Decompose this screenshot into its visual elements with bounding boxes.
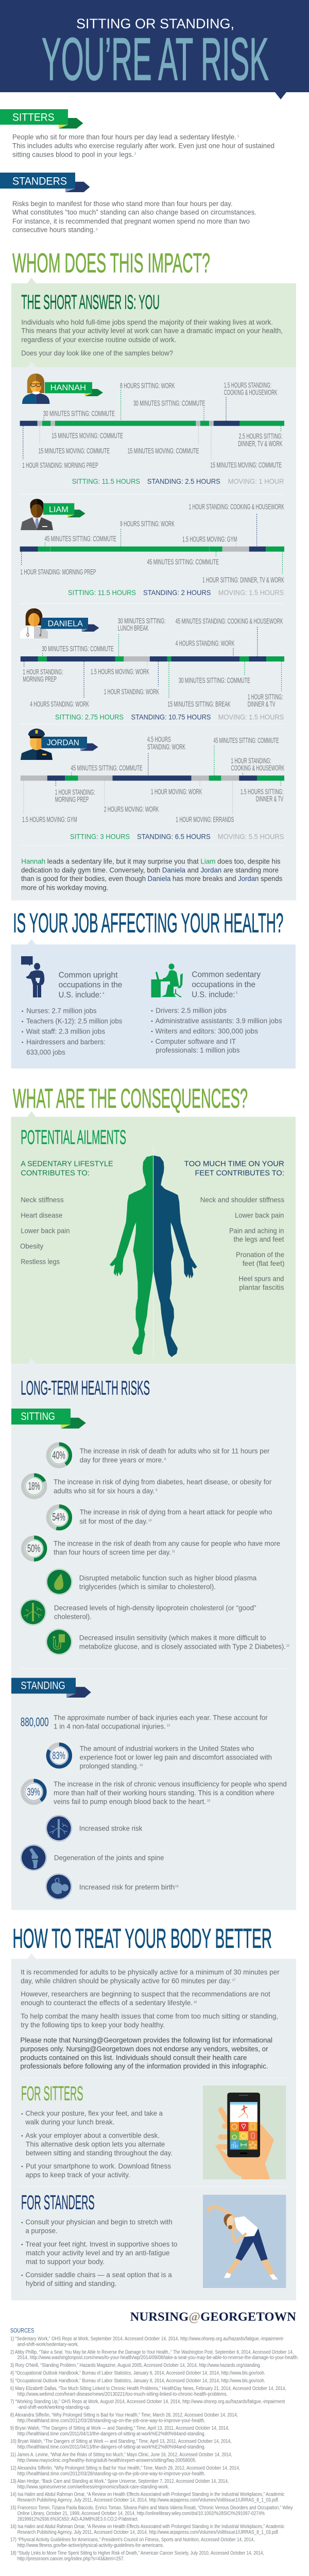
- stat text: 54%: 10: [148, 1519, 152, 1522]
- stat text: 83%: 14: [139, 1764, 143, 1767]
- sources list: 5) “Occupational Outlook Handbook,” Bureau of Labor Statistics, January 8, 2014, Accessed October 14, 2014, http://www.bls.gov/ooh.: [10, 2378, 265, 2384]
- sources list: -and-shift-work/working-standing-up.: [18, 2405, 91, 2411]
- sources list: http://pressroom.cancer.org/index.php?s=43&item=257.: [18, 2556, 125, 2562]
- timeline labels: Jordan: DINNER & TV: [256, 795, 283, 804]
- timeline labels: Daniela: 30 MINUTES SITTING: COMMUTE: [42, 645, 114, 653]
- totals: Jordan: MOVING: 5.5 HOURS: [218, 833, 284, 841]
- upright occupations intro: 4: [102, 992, 105, 995]
- stat number: 880,000: 880,000: [21, 1716, 48, 1730]
- recommendations text: try the following tips to keep your body healthy.: [21, 2021, 165, 2029]
- standers description: 3: [96, 228, 98, 231]
- sitters description: 2: [134, 152, 136, 156]
- sources list: http://www.webmd.com/heart-disease/news/20130221/too-much-sitting-linked-to-chronic-health-problems.: [18, 2392, 228, 2397]
- stat text: 40%: day for three years or more.: [80, 1455, 164, 1464]
- stat text: 54%: sit for most of the day.: [79, 1517, 148, 1526]
- timeline labels: Jordan: 4.5 HOURS: [147, 735, 171, 744]
- timeline labels: Jordan: 1 HOUR MOVING: ERRANDS: [176, 816, 234, 824]
- stat text: 39%: veins fail to pump enough blood back to the heart.: [54, 1797, 206, 1805]
- standing ailments list: Neck and shoulder stiffness: [200, 1196, 284, 1204]
- recommendations text: However, researchers are beginning to suspect that the recommendations are not: [21, 1990, 270, 1998]
- ribbon: sitting: [11, 1409, 86, 1429]
- stat text: 50%: [54, 1539, 280, 1556]
- profile: Jordan: [21, 728, 284, 841]
- risk text: cholesterol: Decreased levels of high-density lipoprotein cholesterol (or “good”: [54, 1604, 256, 1612]
- totals: Hannah: MOVING: 1 HOUR: [228, 477, 284, 485]
- sitters description: 1: [237, 135, 239, 138]
- stat text: 40%: [80, 1447, 270, 1464]
- sedentary occupations intro: occupations in the: [192, 980, 255, 989]
- sedentary ailments list: Obesity: [20, 1242, 43, 1250]
- icon: arteries: [20, 1599, 46, 1625]
- risk text: joints: Degeneration of the joints and spine: [54, 1853, 164, 1861]
- stat text: 18%: 9: [156, 1489, 158, 1492]
- sitters description: People who sit for more than four hours per day lead a sedentary lifestyle.: [12, 133, 236, 141]
- stat text: 50%: than four hours of screen time per day.: [54, 1548, 171, 1556]
- timeline labels: Hannah: 8 HOURS SITTING: WORK: [120, 381, 175, 390]
- ribbon: Daniela: [41, 618, 99, 632]
- sedentary ailments list: [20, 1196, 70, 1265]
- intro text: Does your day look like one of the samples below?: [21, 349, 173, 357]
- donut: 39%: 39%: [27, 1786, 40, 1798]
- summary text: than is good for their bodies, even though Daniela has more breaks and Jordan spends: [21, 874, 282, 883]
- totals: Daniela: [55, 713, 284, 721]
- standing ailments list: plantar fascitis: [239, 1283, 284, 1291]
- icon: standing worker: [21, 956, 44, 997]
- column heading: sedentary lifestyle: [21, 1159, 113, 1177]
- recommendations text: enough to counteract the effects of a sedentary lifestyle.: [21, 1998, 193, 2007]
- ribbon: standers: STANDERS: [12, 175, 67, 187]
- upright occupations list: 633,000 jobs: [26, 1048, 65, 1056]
- stat text: 83%: [80, 1744, 272, 1770]
- ribbon: Hannah: [45, 382, 103, 396]
- upright occupations intro: Common upright: [59, 971, 118, 979]
- panel: potential ailments: POTENTIAL AILMENTS: [21, 1126, 126, 1148]
- tips for standers: [22, 2218, 178, 2287]
- ribbon: Jordan: [41, 737, 98, 751]
- summary text: more of his workday moving.: [21, 883, 108, 891]
- icon: blood pressure cuff: [46, 1629, 72, 1655]
- timeline labels: Jordan: 1 HOUR STANDING:: [231, 757, 271, 766]
- standing ailments list: Heel spurs and: [238, 1275, 284, 1283]
- standers description: For instance, it is recommended that pregnant women spend no more than two: [12, 217, 250, 225]
- totals: Daniela: MOVING: 1.5 HOURS: [218, 713, 284, 721]
- sources list: and-shift-work/sedentary-work.: [18, 2342, 79, 2347]
- timeline labels: Liam: 9 HOURS SITTING: WORK: [120, 520, 175, 529]
- timeline labels: Daniela: 1.5 HOURS MOVING: WORK: [91, 667, 149, 676]
- tips for standers: hybrid of sitting and standing.: [26, 2279, 116, 2287]
- standers description: What constitutes “too much” standing can also change based on circumstances.: [12, 208, 256, 216]
- column heading: too much time on feet: FEET CONTRIBUTES TO:: [195, 1169, 284, 1178]
- sedentary occupations intro: 5: [236, 992, 238, 995]
- sedentary occupations intro: U.S. include:: [192, 990, 235, 999]
- donut: 54%: [48, 1506, 70, 1529]
- section: sitters: [0, 109, 274, 158]
- totals: Hannah: STANDING: 2.5 HOURS: [147, 477, 220, 485]
- stat text: 83%: prolonged standing.: [80, 1762, 139, 1770]
- panel: potential ailments: [11, 1111, 296, 1364]
- risk text: cholesterol: [54, 1604, 256, 1621]
- timeline labels: Daniela: 15 MINUTES SITTING: BREAK: [167, 700, 231, 709]
- totals: Jordan: [70, 833, 284, 841]
- timeline labels: Hannah: [22, 381, 282, 470]
- disclaimer: purposes only. Nursing@Georgetown does not endorse any vendors, websites, or: [20, 2044, 268, 2053]
- stat text: 54%: [79, 1507, 272, 1526]
- stat text: 40%: The increase in risk of death for adults who sit for 11 hours per: [80, 1447, 270, 1455]
- icon: fetus: [46, 1874, 72, 1900]
- panel: treat your body: FOR SITTERS: [21, 2083, 83, 2105]
- sources list: 28199912%2936:6%3C653::AID-AJIM8%3E3.0.CO;2-P/abstract.: [18, 2516, 139, 2522]
- standers description: [12, 199, 256, 234]
- sources list: Online Library, October 21, 1999, Accessed October 14, 2014, http://onlinelibrary.wiley.com/doi/10.1002/%28SICI%291097-0274%: [18, 2511, 265, 2516]
- panel: occupations: [11, 939, 296, 1069]
- tips for sitters: apps to keep track of your activity.: [25, 2171, 130, 2179]
- sedentary occupations list: Writers and editors: 300,000 jobs: [156, 1027, 258, 1035]
- sedentary ailments list: Lower back pain: [21, 1226, 70, 1234]
- sources heading: SOURCES: [10, 2328, 34, 2334]
- timeline labels: Daniela: 4 HOURS STANDING: WORK: [30, 700, 89, 709]
- intro text: [21, 318, 283, 357]
- stat text: 39%: 15: [207, 1800, 211, 1803]
- tips for standers: Consider saddle chairs — a seat option that is a: [25, 2270, 172, 2279]
- panel: treat your body: FOR STANDERS: [21, 2192, 95, 2214]
- donut: 50%: [23, 1537, 45, 1560]
- illustration: woman stretching: [203, 2195, 286, 2288]
- donut: 39%: [23, 1781, 45, 1803]
- timeline labels: Daniela: 30 MINUTES SITTING:: [118, 617, 165, 625]
- sources: [10, 2328, 299, 2562]
- timeline labels: Liam: 1 HOUR STANDING: MORNING PREP: [20, 568, 96, 577]
- column heading: too much time on feet: [184, 1160, 284, 1178]
- avatar: Daniela: [20, 608, 48, 638]
- risk text: preterm birth: 16: [175, 1885, 179, 1888]
- ribbon: sitting: SITTING: [21, 1411, 55, 1422]
- tips for standers: a purpose.: [25, 2227, 58, 2235]
- upright occupations intro: occupations in the: [59, 981, 122, 990]
- sitters description: [12, 133, 274, 158]
- stat text: back injuries: The approximate number of back injuries each year. These account for: [54, 1714, 268, 1722]
- upright occupations list: Hairdressers and barbers:: [26, 1038, 106, 1046]
- timeline labels: Hannah: 15 MINUTES MOVING: COMMUTE: [52, 432, 123, 440]
- stat text: 18%: adults who sit for six hours a day.: [54, 1486, 154, 1495]
- ribbon: Hannah: HANNAH: [50, 384, 86, 393]
- totals: Liam: MOVING: 1.5 HOURS: [218, 588, 284, 597]
- tips for standers: Consult your physician and begin to stretch with: [25, 2218, 173, 2226]
- stat text: 39%: [54, 1780, 287, 1805]
- upright occupations list: Wait staff: 2.3 million jobs: [26, 1027, 105, 1036]
- totals: Jordan: STANDING: 6.5 HOURS: [137, 833, 211, 841]
- timeline: Jordan: [21, 745, 284, 815]
- totals: Liam: [68, 588, 284, 597]
- tips for standers: match your activity level and try an anti-fatigue: [26, 2248, 170, 2257]
- recommendations text: [21, 1968, 280, 2029]
- donut: 18%: [23, 1475, 45, 1497]
- icon: drop: [46, 1569, 72, 1595]
- stat text: 50%: 11: [172, 1550, 175, 1553]
- timeline labels: Daniela: 4 HOURS STANDING: WORK: [176, 639, 234, 648]
- timeline labels: Jordan: 1 HOUR STANDING:: [55, 788, 95, 796]
- totals: Liam: STANDING: 2 HOURS: [143, 588, 211, 597]
- timeline labels: Liam: 45 MINUTES SITTING: COMMUTE: [44, 535, 116, 544]
- panel: short answer: [11, 278, 296, 367]
- sources list: 17) “Physical Activity Guidelines for Americans,” President's Council on Fitness, Sports and Nutrition, Accessed October 14, 2014,: [10, 2537, 254, 2543]
- sedentary occupations list: Administrative assistants: 3.9 million jobs: [156, 1016, 282, 1025]
- title line 1: SITTING OR STANDING,: [76, 16, 234, 31]
- standing ailments list: the legs and feet: [234, 1235, 284, 1243]
- recommendations text: day, while children should be physically active for 60 minutes per day.: [21, 1976, 231, 1985]
- timeline labels: Jordan: 1.5 HOURS MOVING: GYM: [22, 816, 77, 824]
- stat text: back injuries: [54, 1714, 268, 1731]
- intro text: This means that your activity level at work can have a dramatic impact on your health,: [21, 327, 283, 335]
- tips for sitters: Check your posture, flex your feet, and take a: [25, 2109, 163, 2117]
- logo: Nursing@Georgetown: NURSING@GEORGETOWN: [130, 2310, 297, 2324]
- sources list: http://www.spineuniverse.com/wellness/ergonomics/back-care-standing-work.: [18, 2484, 169, 2490]
- icon: seated worker: [151, 963, 183, 997]
- timeline labels: Jordan: 1 HOUR MOVING: WORK: [151, 788, 202, 796]
- disclaimer: Please note that Nursing@Georgetown provides the following list for informational: [20, 2036, 272, 2044]
- ribbon: sitters: [0, 109, 83, 129]
- upright occupations intro: U.S. include:: [59, 991, 101, 999]
- risk text: cholesterol: cholesterol).: [54, 1613, 92, 1621]
- sources list: 9) Bryan Walsh, “The Dangers of Sitting at Work — and Standing,” Time, April 13, 2011, Accessed October 14, 2014,: [10, 2426, 229, 2431]
- header banner: [0, 0, 309, 99]
- summary text: dedication to daily gym time. Conversely, both Daniela and Jordan are standing more: [21, 866, 279, 874]
- sedentary occupations intro: [192, 971, 261, 999]
- panel: treat your body: [11, 1954, 296, 2300]
- upright occupations intro: [59, 971, 122, 999]
- column heading: sedentary lifestyle: A SEDENTARY LIFESTYLE: [21, 1159, 113, 1168]
- body silhouette: [110, 1146, 197, 1359]
- sitters description: This includes adults who exercise regularly after work. Even just one hour of sustained: [12, 141, 274, 149]
- stat text: back injuries: 1 in 4 non-fatal occupational injuries.: [54, 1722, 166, 1731]
- donut: 40%: 40%: [52, 1450, 65, 1462]
- panel: short answer: THE SHORT ANSWER IS: YOU: [21, 291, 160, 313]
- tips for standers: mat to support your body.: [26, 2257, 105, 2265]
- column heading: too much time on feet: TOO MUCH TIME ON YOUR: [184, 1160, 284, 1168]
- donut: 50%: 50%: [27, 1543, 40, 1555]
- timeline labels: Jordan: [22, 735, 284, 824]
- stat text: 83%: experience foot or lower leg pain and discomfort associated with: [80, 1753, 272, 1761]
- standing ailments list: feet (flat feet): [243, 1259, 284, 1267]
- timeline labels: Hannah: 1.5 HOURS STANDING:: [224, 381, 271, 389]
- recommendations text: To help combat the many health issues that come from too much sitting or standing,: [21, 2012, 278, 2020]
- sources list: http://healthland.time.com/2011/04/13/the-dangers-of-sitting-at-work%E2%80%94and-standing.: [18, 2445, 205, 2450]
- standers description: consecutive hours standing.: [12, 226, 95, 234]
- stat text: back injuries: 13: [167, 1724, 170, 1727]
- intro text: regardless of your exercise routine outside of work.: [21, 335, 177, 344]
- icon: knee joint: [21, 1845, 46, 1871]
- timeline labels: Hannah: 1 HOUR STANDING: MORNING PREP: [22, 461, 98, 470]
- timeline labels: Jordan: 45 MINUTES SITTING: COMMUTE: [71, 764, 143, 773]
- timeline labels: Daniela: [23, 617, 283, 709]
- timeline labels: Jordan: MORNING PREP: [55, 795, 89, 804]
- sedentary occupations list: Computer software and IT: [156, 1037, 236, 1045]
- ribbon: Liam: LIAM: [49, 505, 68, 514]
- ribbon: sitters: SITTERS: [12, 111, 55, 124]
- sources list: http://www.mayoclinic.org/healthy-living/adult-health/expert-answers/sitting/faq-20058005.: [18, 2458, 196, 2464]
- tips for sitters: Put your smartphone to work. Download fitness: [26, 2162, 171, 2170]
- totals: Liam: SITTING: 11.5 HOURS: [68, 588, 136, 597]
- ribbon: Liam: [43, 503, 85, 517]
- risk text: insulin: [79, 1633, 290, 1650]
- timeline labels: Hannah: 15 MINUTES MOVING: COMMUTE: [128, 447, 199, 455]
- avatar: Liam: [21, 499, 53, 530]
- donut: 83%: 83%: [52, 1750, 65, 1761]
- disclaimer: professionals before following any of the information provided in this infographic.: [20, 2062, 268, 2070]
- panel: long-term health risks: [11, 1359, 296, 1910]
- sources list: 11) James A. Levine, “What Are the Risks of Sitting too Much,” Mayo Clinic, June 16, 2012, Accessed October 14, 2014,: [10, 2452, 232, 2458]
- sedentary ailments list: Neck stiffness: [21, 1196, 64, 1204]
- stat text: 40%: 8: [164, 1458, 166, 1461]
- sources list: 8) Alexandra Sifferlin, “Why Prolonged Sitting is Bad for Your Health,” Time, March 28, 2012, Accessed October 14, 2014,: [10, 2412, 238, 2418]
- timeline: Hannah: [20, 390, 284, 460]
- risk text: preterm birth: Increased risk for preterm birth: [79, 1883, 175, 1891]
- illustration: hand holding smartphone: [203, 2086, 286, 2179]
- ribbon: standers: [0, 173, 90, 192]
- timeline labels: Jordan: 2 HOURS MOVING: WORK: [104, 805, 159, 814]
- tips for sitters: Ask your employer about a convertible desk.: [25, 2131, 160, 2139]
- timeline labels: Liam: 1.5 HOURS MOVING: GYM: [182, 535, 237, 544]
- standers description: Risks begin to manifest for those who stand more than four hours per day.: [12, 199, 233, 208]
- timeline: Daniela: [21, 627, 284, 699]
- upright occupations list: [22, 1007, 122, 1056]
- stat text: 50%: The increase in the risk of death from any cause for people who have more: [54, 1539, 280, 1548]
- totals: Hannah: SITTING: 11.5 HOURS: [72, 477, 140, 485]
- tips for sitters: walk during your lunch break.: [25, 2118, 114, 2126]
- sources list: 4) “Occupational Outlook Handbook,” Bureau of Labor Statistics, January 8, 2014, Accessed October 14, 2014, http://www.bls.gov/ooh.: [10, 2370, 265, 2376]
- icon: arteries (stroke): [46, 1816, 72, 1841]
- risk text: insulin: 12: [286, 1645, 290, 1648]
- sources list: http://www.fitness.gov/be-active/physical-activity-guidelines-for-americans.: [18, 2543, 164, 2549]
- timeline labels: Daniela: MORNING PREP: [23, 675, 57, 684]
- timeline labels: Jordan: STANDING: WORK: [147, 742, 185, 751]
- disclaimer: products contained on this list. Individuals should consult their health care: [20, 2053, 247, 2061]
- standing ailments list: Pronation of the: [236, 1250, 284, 1259]
- profile: Liam: [20, 499, 284, 597]
- tips for sitters: [22, 2109, 173, 2179]
- profile: Hannah: [20, 374, 284, 485]
- risk text: insulin: metabolize glucose, and is closely associated with Type 2 Diabetes).: [79, 1642, 286, 1650]
- sources list: 10) Bryan Walsh, “The Dangers of Sitting at Work — and Standing,” Time, April 13, 2011, Accessed October 14, 2014,: [10, 2439, 232, 2445]
- sources list: http://healthland.time.com/2011/04/13/the-dangers-of-sitting-at-work%E2%80%94and-standing.: [18, 2431, 205, 2437]
- standing ailments list: [200, 1196, 284, 1291]
- totals: Jordan: SITTING: 3 HOURS: [70, 833, 130, 841]
- intro text: Individuals who hold full-time jobs spend the majority of their waking lives at work.: [21, 318, 273, 326]
- sitters description: sitting causes blood to pool in your legs.: [12, 150, 134, 158]
- donut: 54%: 54%: [52, 1512, 65, 1523]
- sedentary occupations list: professionals: 1 million jobs: [156, 1046, 239, 1054]
- sources list: [10, 2336, 299, 2562]
- totals: Hannah: [72, 477, 284, 485]
- timeline labels: Daniela: 1 HOUR STANDING:: [23, 668, 63, 676]
- standing ailments list: Lower back pain: [235, 1211, 284, 1219]
- sources list: http://healthland.time.com/2012/03/28/standing-up-on-the-job-one-way-to-improve-your-health.: [18, 2471, 205, 2477]
- stat text: 18%: The increase in risk of dying from diabetes, heart disease, or obesity for: [54, 1478, 272, 1486]
- profile: Daniela: [20, 608, 284, 721]
- avatar: Jordan: [21, 728, 53, 760]
- recommendations text: It is recommended for adults to be physically active for a minimum of 30 minutes per: [21, 1968, 280, 1976]
- timeline labels: Daniela: 30 MINUTES SITTING: COMMUTE: [179, 676, 250, 685]
- recommendations text: 17: [232, 1979, 236, 1982]
- upright occupations list: Nurses: 2.7 million jobs: [26, 1007, 96, 1015]
- stat text: 54%: The increase in risk of dying from a heart attack for people who: [80, 1507, 272, 1516]
- sources list: 13) Alan Hedge, “Back Care and Standing at Work,” Spine Universe, September 7, 2012, Accessed October 14, 2014,: [10, 2479, 229, 2484]
- timeline labels: Daniela: 1 HOUR STANDING: WORK: [104, 688, 159, 697]
- stat text: 39%: The increase in the risk of chronic venous insufficiency for people who spend: [54, 1780, 287, 1788]
- risk text: insulin: Decreased insulin sensitivity (which makes it more difficult to: [79, 1633, 266, 1641]
- timeline labels: Liam: [20, 502, 284, 585]
- donut: 83%: [48, 1744, 70, 1767]
- section: standers: [0, 173, 256, 234]
- summary text: Hannah leads a sedentary life, but it may surprise you that Liam does too, despite his: [21, 857, 281, 866]
- column heading: sedentary lifestyle: CONTRIBUTES TO:: [21, 1168, 90, 1177]
- standing ailments list: Pain and aching in: [229, 1226, 284, 1234]
- avatar: Hannah: [22, 374, 49, 404]
- totals: Daniela: STANDING: 10.75 HOURS: [131, 713, 211, 721]
- timeline labels: Daniela: LUNCH BREAK: [118, 624, 148, 633]
- timeline labels: Hannah: 15 MINUTES MOVING: COMMUTE: [39, 447, 110, 455]
- risk text: metabolic: Disrupted metabolic function such as higher blood plasma: [79, 1574, 256, 1582]
- sedentary occupations intro: Common sedentary: [192, 971, 261, 979]
- sedentary ailments list: Heart disease: [21, 1211, 62, 1219]
- timeline labels: Liam: 45 MINUTES SITTING: COMMUTE: [147, 558, 219, 567]
- timeline labels: Hannah: 30 MINUTES SITTING: COMMUTE: [133, 399, 205, 408]
- timeline labels: Daniela: DINNER & TV: [248, 700, 276, 709]
- stat text: 39%: more than half of their working hours standing. This is a condition where: [54, 1788, 274, 1797]
- summary text: [21, 857, 282, 891]
- risk text: metabolic: [79, 1574, 256, 1591]
- risk text: stroke: Increased stroke risk: [79, 1824, 143, 1832]
- ribbon: standing: [11, 1678, 91, 1698]
- sedentary occupations list: [151, 1006, 282, 1054]
- panel: long-term health risks: LONG-TERM HEALTH RISKS: [21, 1377, 150, 1399]
- panel: sample days: [11, 362, 296, 901]
- tips for standers: Treat your feet right. Invest in supportive shoes to: [25, 2240, 178, 2248]
- ribbon: Jordan: JORDAN: [47, 739, 79, 748]
- timeline: Liam: [20, 514, 284, 574]
- stat text: 18%: [54, 1478, 272, 1495]
- tips for sitters: between sitting and standing throughout the day.: [26, 2148, 173, 2157]
- donut: 40%: [48, 1444, 70, 1466]
- sources list: 3) Rory O'Neill, “Standing Problem,” Hazards Magazine, August 2005, Accessed October 14, 2014, http://www.hazards.org/standing.: [10, 2363, 261, 2368]
- ribbon: Daniela: DANIELA: [48, 620, 83, 629]
- sources list: http://healthland.time.com/2012/03/28/standing-up-on-the-job-one-way-to-improve-your-health.: [18, 2418, 205, 2424]
- timeline labels: Hannah: 30 MINUTES SITTING: COMMUTE: [43, 409, 115, 418]
- sedentary occupations list: Drivers: 2.5 million jobs: [156, 1006, 227, 1014]
- risk text: metabolic: triglycerides (which is similar to cholesterol).: [79, 1583, 216, 1591]
- upright occupations list: Teachers (K-12): 2.5 million jobs: [26, 1017, 122, 1025]
- donut: 18%: 18%: [28, 1481, 40, 1493]
- disclaimer: [20, 2036, 272, 2070]
- sources list: 12) Alexandra Sifferlin, “Why Prolonged Sitting is Bad for Your Health,” Time, March 28, 2012, Accessed October 14, 2014,: [10, 2465, 240, 2471]
- recommendations text: 18: [194, 2001, 197, 2004]
- ribbon: standing: STANDING: [21, 1680, 65, 1691]
- tips for sitters: This alternative desk option lets you alternate: [26, 2140, 165, 2148]
- totals: Daniela: SITTING: 2.75 HOURS: [55, 713, 124, 721]
- sedentary ailments list: Restless legs: [21, 1257, 60, 1265]
- stat text: 83%: The amount of industrial workers in the United States who: [80, 1744, 254, 1753]
